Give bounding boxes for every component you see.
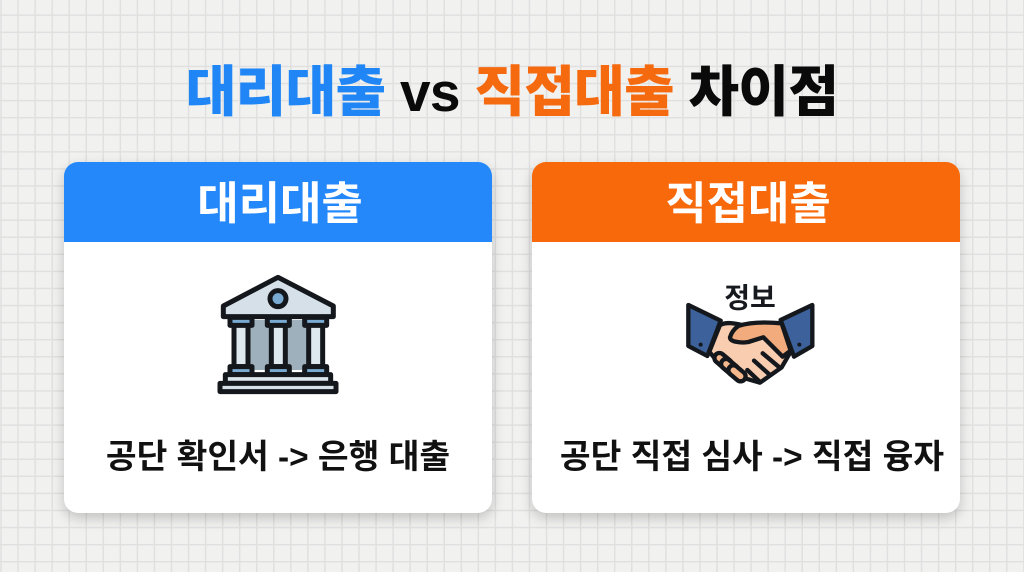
heading: 직접대출 — [532, 162, 960, 242]
caption: 공단 확인서 -> 은행 대출: 공단 확인서 -> 은행 대출 — [106, 439, 450, 476]
heading: 대리대출: 대리대출 — [197, 178, 363, 229]
title: 대리대출 vs 직접대출 차이점 — [186, 61, 838, 123]
caption: 공단 직접 심사 -> 직접 융자: 공단 직접 심사 -> 직접 융자 — [560, 439, 944, 476]
panel: 직접대출 — [532, 162, 960, 513]
panel: 대리대출 — [64, 162, 492, 513]
label: 정보: 정보 — [724, 282, 776, 313]
icon: handshake with label 정보 — [686, 282, 814, 385]
icon: bank building — [218, 274, 338, 394]
heading: 직접대출: 직접대출 — [665, 178, 831, 229]
heading: 대리대출 — [64, 162, 492, 242]
